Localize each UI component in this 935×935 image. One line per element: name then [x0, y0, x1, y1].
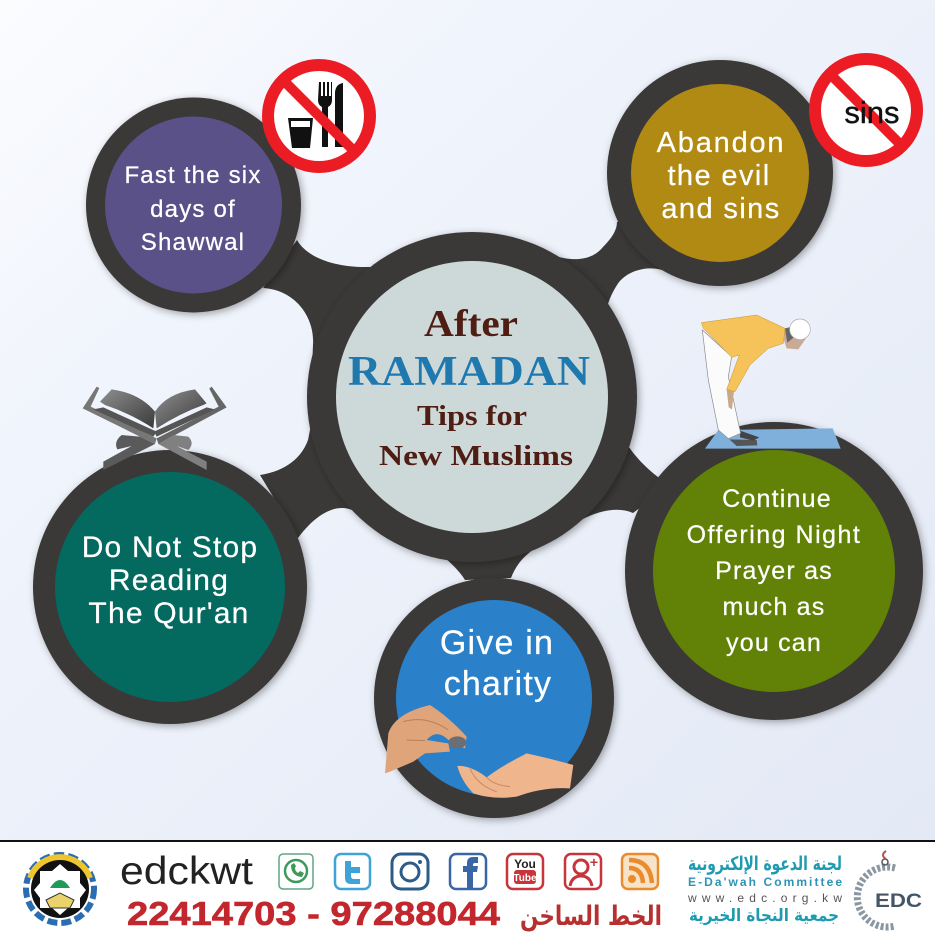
society name arabic: جمعية النجاة الخيرية [689, 906, 839, 926]
logo: EDC globe: EDC [875, 891, 922, 912]
node: Continue Offering Night Prayer as much as you can: Continue [722, 485, 832, 513]
icon: instagram [392, 854, 428, 889]
node: Do Not Stop Reading The Qur'an: Reading [109, 564, 229, 597]
icon: knife [335, 83, 343, 147]
node: Continue Offering Night Prayer as much as you can: Prayer as [715, 557, 833, 585]
committee name arabic: لجنة الدعوة الإلكترونية [688, 853, 842, 875]
icon: whatsapp [279, 854, 313, 889]
node: Continue Offering Night Prayer as much as you can: you can [726, 629, 822, 657]
node: Fast the six days of Shawwal [86, 98, 301, 312]
title: New Muslims: New Muslims [379, 440, 573, 472]
node: Do Not Stop Reading The Qur'an [33, 450, 307, 724]
icon: youtube: Tube [513, 873, 537, 884]
footer [0, 840, 935, 935]
title: RAMADAN: RAMADAN [348, 349, 590, 395]
node: Fast the six days of Shawwal: Fast the six [124, 162, 262, 189]
prayer mat [705, 428, 841, 449]
icon: glass [288, 118, 313, 148]
node: Abandon the evil and sins [607, 60, 833, 286]
center node: title [307, 232, 637, 562]
node: Abandon the evil and sins: and sins [661, 193, 781, 225]
node: Abandon the evil and sins: Abandon [657, 127, 785, 159]
hand [727, 389, 734, 409]
icon: no sins: sins [844, 95, 900, 130]
shoes [729, 439, 757, 446]
node: Give in charity: charity [444, 665, 552, 703]
node: Continue Offering Night Prayer as much as you can: much as [723, 593, 825, 621]
icon: fork [318, 82, 332, 147]
icon: twitter [335, 854, 370, 889]
node: Continue Offering Night Prayer as much as you can: Offering Night [687, 521, 861, 549]
committee name english: E-Da'wah Committee [688, 875, 842, 889]
handle: edckwt [120, 850, 253, 893]
node: Abandon the evil and sins: the evil [667, 160, 771, 192]
connector network [260, 200, 700, 580]
logo: society emblem [26, 855, 94, 923]
node: Give in charity [374, 578, 614, 818]
icon: facebook [450, 854, 486, 889]
hotline label: الخط الساخن [520, 901, 662, 932]
node: Continue Offering Night Prayer as much as you can [625, 422, 923, 720]
icon: no food and drink [268, 65, 370, 167]
icon: rss [622, 854, 658, 889]
logo: EDC globe [857, 851, 922, 927]
website: www.edc.org.kw [687, 891, 842, 905]
title: After: After [424, 303, 518, 345]
node: Do Not Stop Reading The Qur'an: Do Not Stop [82, 531, 258, 564]
cap [790, 319, 810, 340]
shirt [701, 315, 785, 392]
face [784, 328, 806, 349]
icon: youtube [507, 854, 543, 889]
icon: youtube: You [514, 857, 536, 871]
icon: man bowing on prayer mat [701, 315, 841, 449]
icon: open Quran on stand [83, 387, 227, 470]
node: Fast the six days of Shawwal: days of [150, 196, 236, 223]
node: Do Not Stop Reading The Qur'an: The Qur'an [88, 597, 250, 630]
giving hand [385, 705, 467, 773]
coin [448, 736, 466, 748]
receiving hand [457, 753, 573, 798]
icon: hands giving coin [385, 705, 573, 798]
phone numbers: 22414703 - 97288044 [127, 895, 501, 932]
node: Give in charity: Give in [440, 624, 554, 662]
icon: no sins [815, 59, 917, 161]
title: Tips for: Tips for [417, 400, 527, 432]
icon: google plus [565, 854, 601, 889]
trousers [702, 330, 741, 439]
node: Fast the six days of Shawwal: Shawwal [141, 229, 245, 256]
icon: google plus: + [590, 854, 598, 870]
